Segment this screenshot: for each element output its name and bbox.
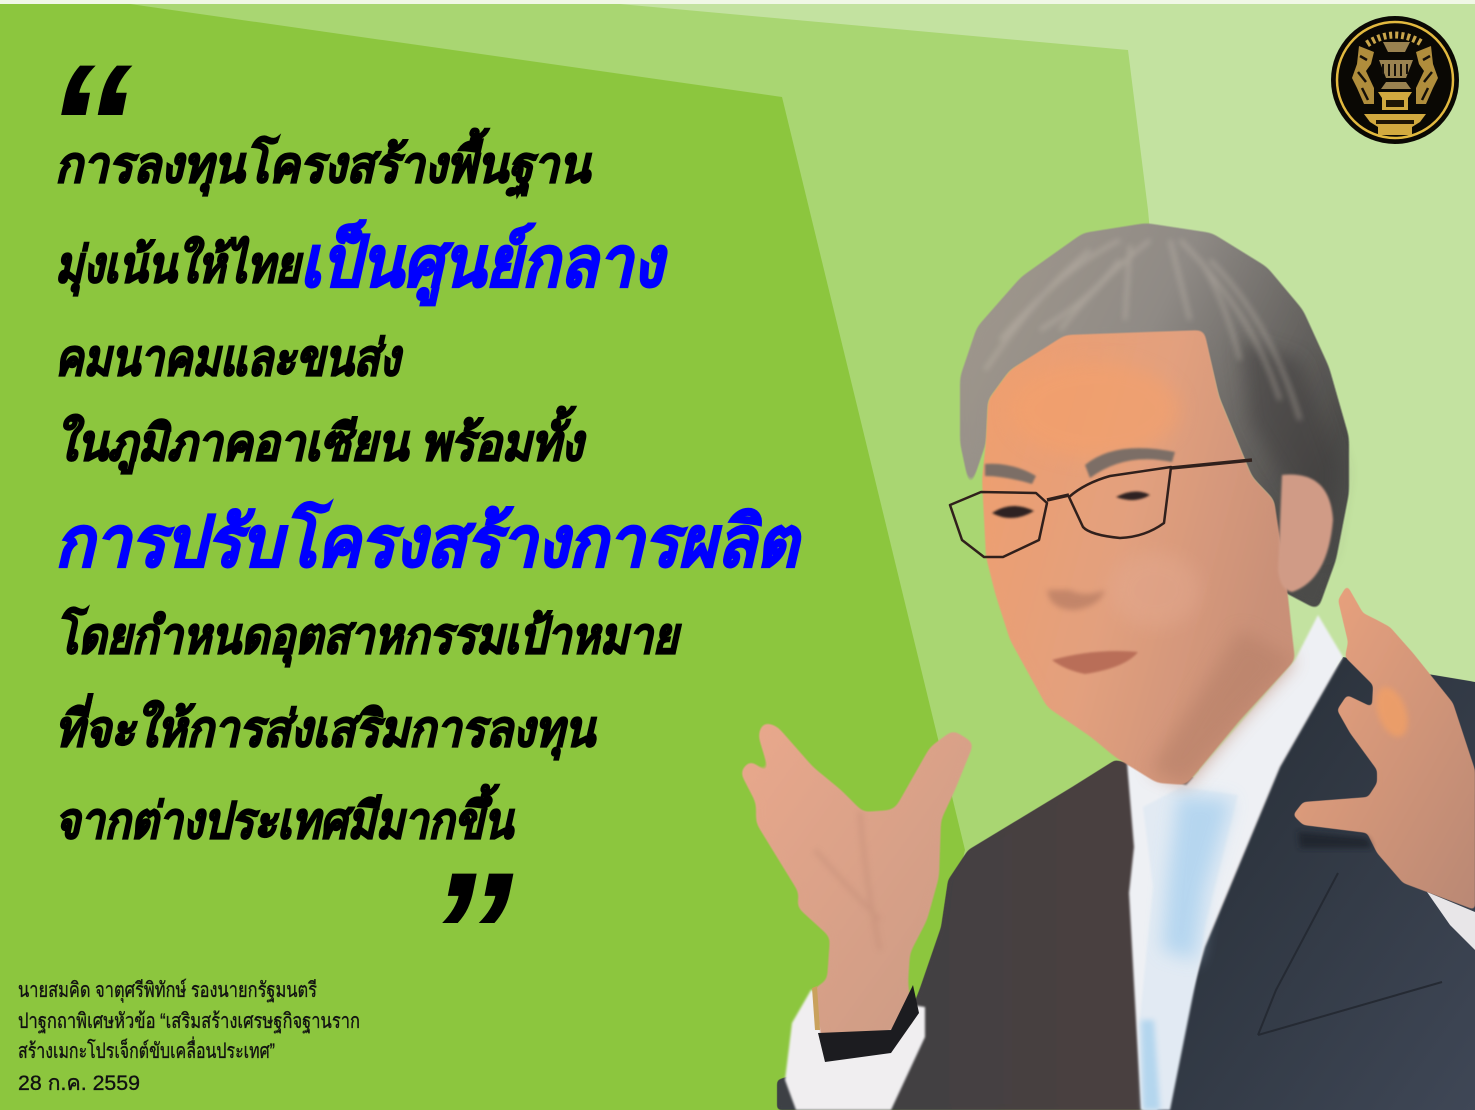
hair [960,223,1349,610]
tie lower edge [1141,1020,1160,1110]
dark hair shading [1240,340,1340,560]
face [982,330,1295,785]
glasses [950,460,1252,557]
line 7: ที่จะให้การส่งเสริมการลงทุน [55,693,597,760]
line 6: โดยกำหนดอุตสาหกรรมเป้าหมาย [55,606,682,667]
left cuff [785,990,925,1110]
opening quotation mark: “ [45,29,133,224]
hair strands [985,240,1300,420]
right hand shadow [1298,832,1372,848]
mouth [1052,651,1138,674]
line 8: จากต่างประเทศมีมากขึ้น [55,784,515,849]
attribution line 2: ปาฐกถาพิเศษหัวข้อ “เสริมสร้างเศรษฐกิจฐานราก [18,1010,360,1033]
emblem seal [1331,16,1459,144]
line 5 highlight: การปรับโครงสร้างการผลิต [55,501,801,581]
closing quotation mark: ” [426,837,514,1032]
wristwatch [818,985,919,1062]
line 2 highlight: เป็นศูนย์กลาง [300,220,667,306]
attribution line 3: สร้างเมกะโปรเจ็กต์ขับเคลื่อนประเทศ” [18,1036,275,1063]
portrait of speaker [740,223,1475,1110]
quote text [55,128,801,849]
ear [1278,475,1333,592]
right hand [1293,585,1475,910]
neck shadow [1150,630,1295,785]
line 2: มุ่งเน้นให้ไทย [55,236,304,296]
gold bracelet [812,986,820,1030]
right hand highlight [1370,683,1414,741]
emblem: right lion [1416,46,1438,104]
line 1: การลงทุนโครงสร้างพื้นฐาน [55,128,592,198]
eyes [992,491,1150,518]
cheek highlight [1110,552,1200,628]
emblem: crown flames [1367,35,1423,44]
eyebrows [985,448,1175,484]
emblem: left lion [1352,46,1374,104]
shirt collar [1127,615,1343,1110]
line 4: ในภูมิภาคอาเซียน พร้อมทั้ง [55,406,586,474]
hand creases [815,812,880,950]
lapel seams [1258,873,1442,1035]
right cuff [1427,892,1475,950]
emblem: bowl [1379,42,1413,89]
emblem: pedestal [1364,92,1426,135]
forehead highlight [1010,362,1180,458]
line 3: คมนาคมและขนส่ง [55,330,403,386]
left hand [740,722,974,1045]
attribution date: 28 ก.ค. 2559 [18,1072,140,1095]
attribution [18,978,360,1095]
jacket [777,657,1475,1110]
tie stripe [1162,795,1232,960]
attribution line 1: นายสมคิด จาตุศรีพิทักษ์ รองนายกรัฐมนตรี [18,978,317,1003]
tie [1139,787,1238,1110]
jacket right lapel [1157,657,1475,1110]
nose shading [1047,590,1105,610]
